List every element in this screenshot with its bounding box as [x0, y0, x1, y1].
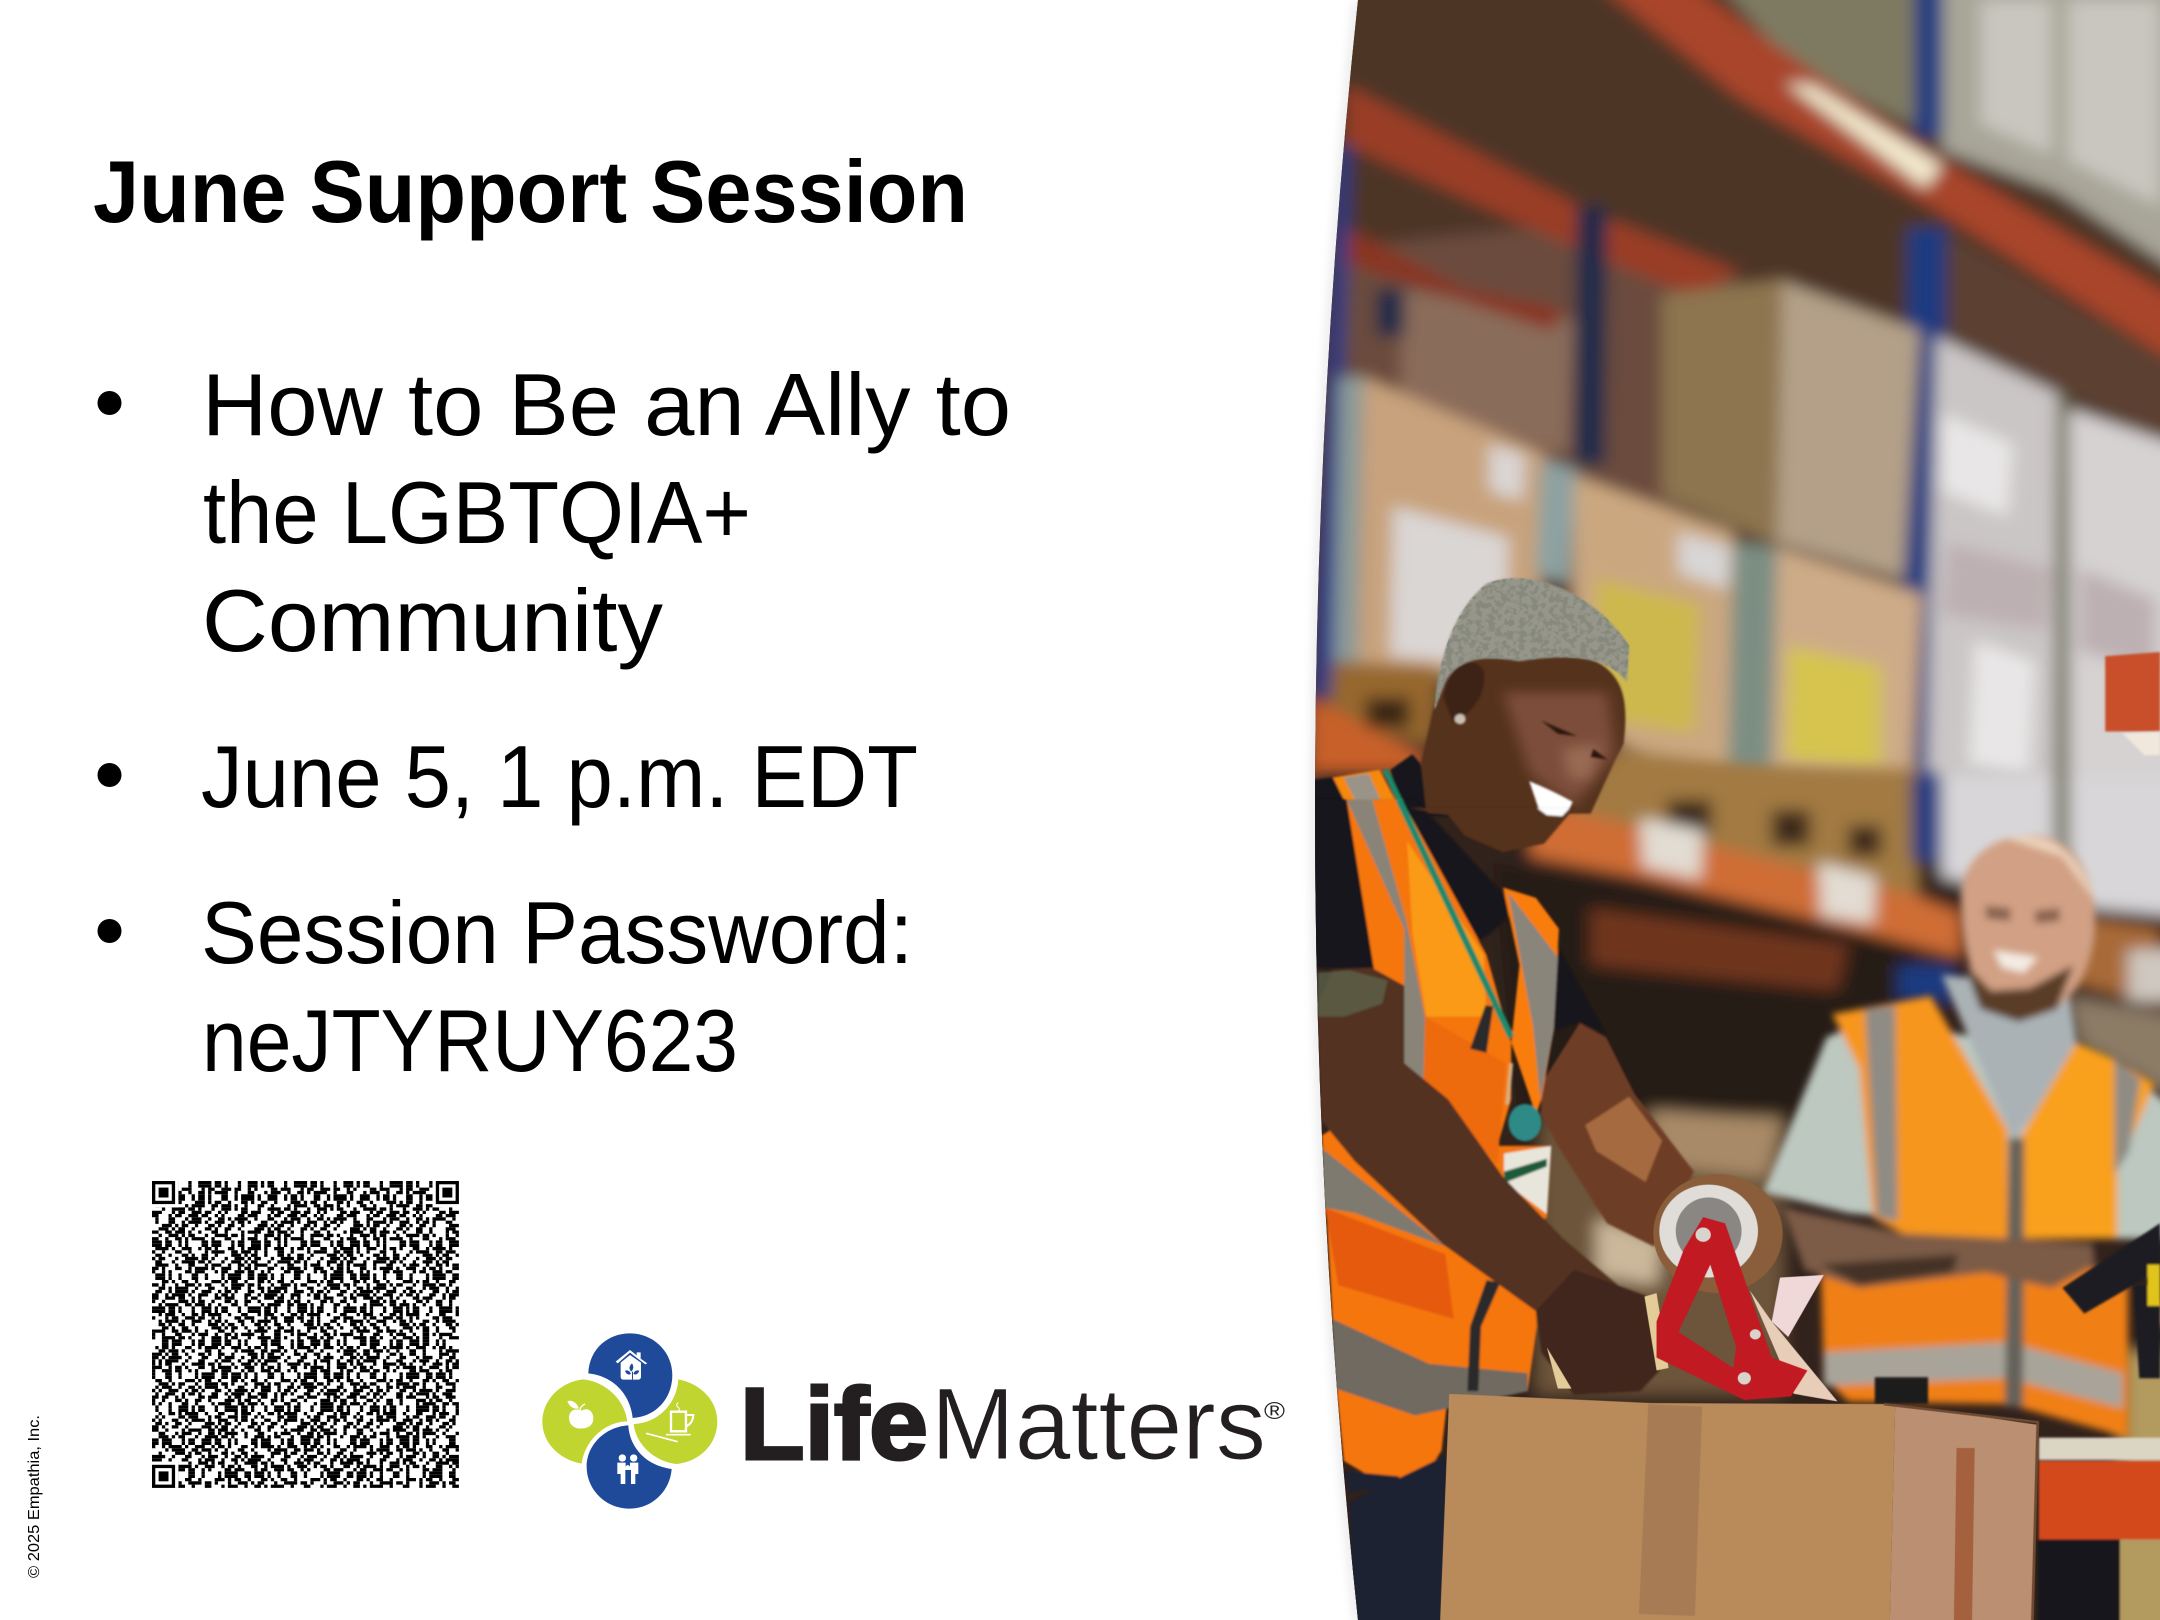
icon: apple — [567, 1401, 593, 1428]
vest — [1322, 800, 1551, 1500]
lanyard and badge — [1399, 800, 1511, 1037]
bullet list — [98, 355, 1011, 1090]
logo wordmark: Life — [740, 1367, 928, 1481]
left arm and tattoo — [1318, 966, 1618, 1312]
man in orange vest — [1763, 836, 2160, 1438]
bullet: session topic: Community — [202, 571, 663, 670]
warehouse shelving, upper background — [1245, 0, 2160, 878]
chin and neck — [1410, 808, 1574, 852]
orange sign and woman's head — [1311, 578, 2160, 816]
cardboard box — [1440, 1394, 2038, 1620]
shirt — [1315, 798, 1510, 969]
photo edge shadow — [1315, 0, 1358, 1620]
right arm — [1541, 1023, 1694, 1247]
copyright: © 2025 Empathia, Inc. — [26, 1415, 43, 1578]
icon: family — [617, 1454, 638, 1484]
bullet: session topic: How to Be an Ally to — [202, 355, 1011, 454]
LifeMatters logo — [542, 1333, 1285, 1509]
tape dispenser — [1547, 1174, 1838, 1402]
logo wordmark: Matters — [931, 1367, 1266, 1481]
petal: family — [587, 1425, 672, 1509]
bullet: session topic: the LGBTQIA+ — [203, 463, 751, 562]
icon: house — [616, 1350, 647, 1380]
petal: wellness — [634, 1379, 717, 1464]
bullet: session password — [98, 883, 913, 1090]
woman's face and hair — [1421, 646, 1625, 814]
logo wordmark: ® — [1264, 1398, 1285, 1425]
bullet: date and time: June 5, 1 p.m. EDT — [201, 727, 918, 826]
petal: home — [588, 1333, 672, 1418]
scanner — [1875, 1223, 2160, 1404]
bullet: session password: Session Password: — [201, 883, 913, 982]
warehouse shelving, lower background — [1311, 769, 2160, 1620]
title: June Support Session — [93, 142, 968, 241]
icon: mug and pen — [646, 1403, 693, 1442]
logo wordmark — [740, 1367, 1285, 1481]
base — [1349, 1456, 1445, 1620]
logo emblem — [542, 1333, 717, 1509]
table — [2038, 1438, 2160, 1620]
bullet: session password: neJTYRUY623 — [202, 991, 738, 1090]
orange sign — [2105, 652, 2160, 755]
bullet: session topic — [98, 355, 1011, 670]
petal: nutrition — [542, 1379, 627, 1464]
photo: warehouse workers packing a box — [1245, 0, 2160, 1620]
QR code — [152, 1181, 459, 1488]
woman's collar and shoulder — [1311, 754, 1465, 816]
woman and foreground objects — [1311, 800, 2160, 1620]
